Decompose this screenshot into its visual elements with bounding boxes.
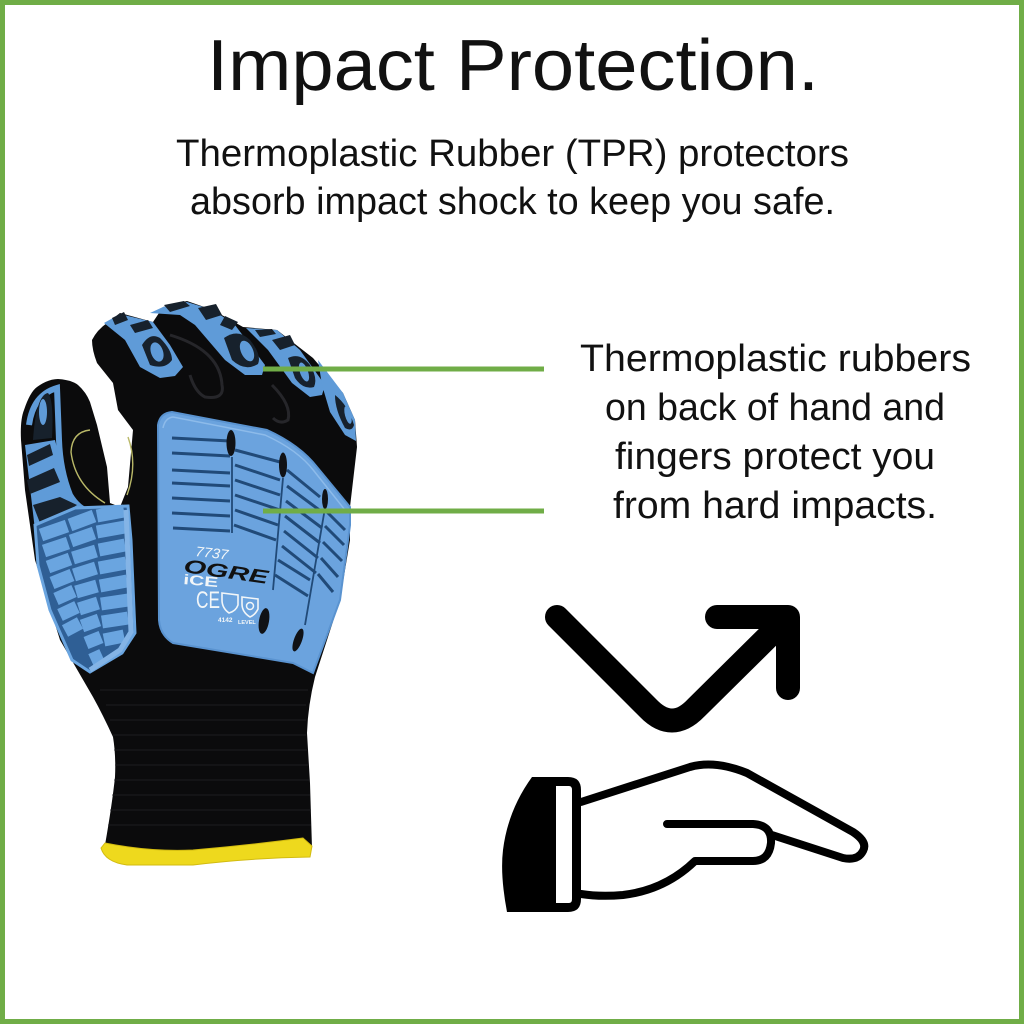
callout text: on back of hand and [605, 387, 945, 429]
yellow cuff edge [101, 838, 312, 865]
glove illustration [21, 301, 357, 865]
plate ribs [172, 438, 345, 625]
back of hand plate [158, 412, 350, 673]
hand outline [581, 765, 864, 896]
plate printed marks: iCE [183, 571, 219, 590]
callout text: Thermoplastic rubbers [580, 338, 971, 380]
title: Impact Protection. [207, 26, 819, 106]
lower thumb pad [35, 506, 135, 672]
ring finger guard [246, 328, 325, 397]
thumb guard [25, 388, 110, 530]
subtitle [176, 133, 849, 223]
little finger guard [318, 360, 356, 441]
knit wrist texture [100, 690, 311, 825]
subtitle: absorb impact shock to keep you safe. [190, 181, 835, 223]
callout text: fingers protect you [615, 436, 935, 478]
thumb palm patch stitching [71, 430, 105, 503]
plate vent holes [226, 430, 328, 653]
callout line: back of hand [263, 508, 544, 514]
callout line: fingers [263, 366, 544, 372]
subtitle: Thermoplastic Rubber (TPR) protectors [176, 133, 849, 175]
callout text: from hard impacts. [613, 485, 937, 527]
index finger guard [104, 312, 183, 378]
icon: bounce arrow [557, 617, 788, 720]
plate printed marks: LEVEL [238, 620, 256, 626]
glove body [21, 301, 357, 862]
callout text [580, 338, 971, 527]
hand cuff [502, 777, 581, 912]
plate printed marks: 7737 [195, 543, 230, 563]
middle finger guard [150, 301, 265, 375]
icon: hand [502, 765, 864, 912]
plate printed marks: 4142 [218, 617, 233, 624]
plate printed marks: CE [196, 587, 220, 614]
plate printed marks: OGRE [182, 556, 271, 589]
finger shading [170, 335, 289, 422]
plate printed marks [182, 543, 271, 626]
